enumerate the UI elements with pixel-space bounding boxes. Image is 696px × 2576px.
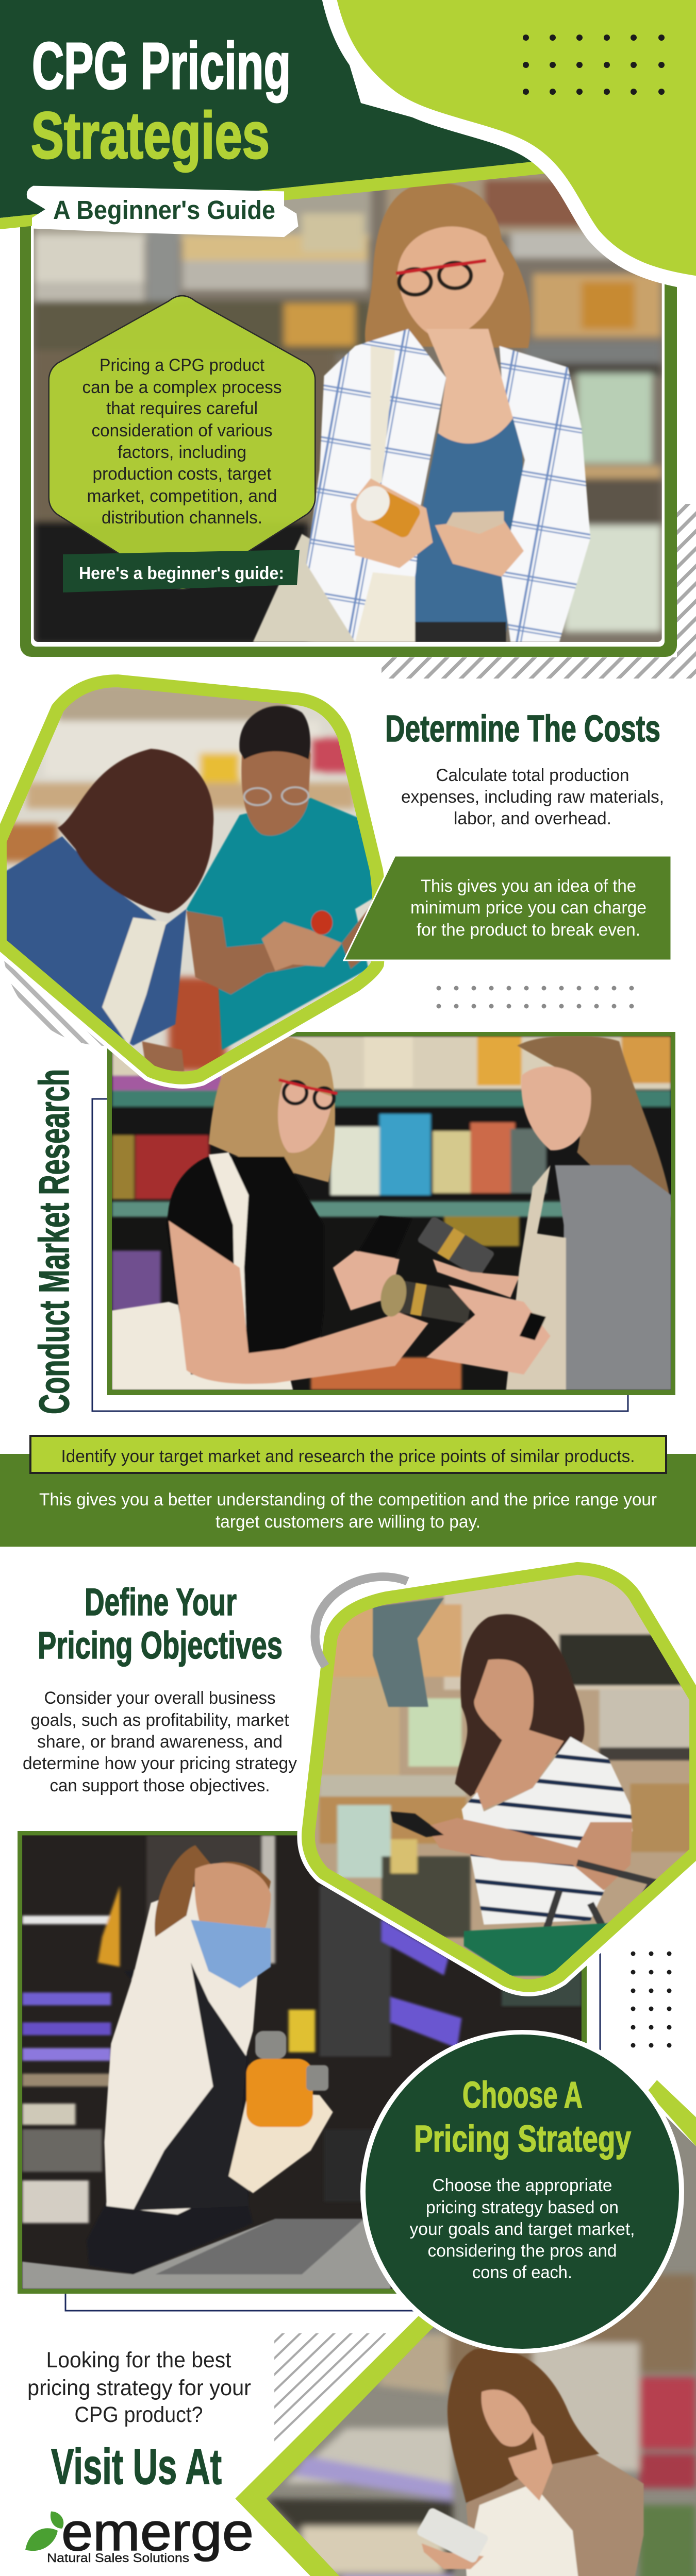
heading: conduct market research: Conduct Market Research [31, 1069, 78, 1414]
striped circle: behind step one photo [3, 840, 209, 1046]
lime corner blob [327, 0, 696, 284]
heading: pricing objectives [38, 1581, 283, 1667]
circle panel: choose a pricing strategy [360, 2030, 684, 2353]
blouse [466, 2484, 586, 2576]
bottle [246, 2059, 313, 2127]
face left [278, 1080, 333, 1153]
hexagon callout: distribution channels. [102, 508, 262, 528]
jacket [466, 2454, 643, 2576]
counter [22, 2219, 391, 2289]
diagonal stripes: closing [274, 2333, 386, 2445]
callout: break-even: minimum price you can charge [410, 898, 647, 918]
logo: emerge: Natural Sales Solutions [47, 2551, 189, 2565]
bag strap [371, 346, 395, 483]
grey shirt [555, 1165, 671, 1390]
right woman hair [517, 1036, 671, 1204]
dot grid: step three [631, 1952, 671, 2047]
black shirt [167, 1157, 324, 1375]
market research photo: two women in snack aisle [112, 1036, 671, 1390]
text block: determine the costs: labor, and overhead. [454, 809, 611, 828]
right woman face [521, 1066, 591, 1150]
guide banner: Here's a beginner's guide: [79, 564, 284, 583]
phone [446, 511, 504, 534]
face [397, 227, 504, 340]
phone [391, 1811, 444, 1837]
bottle [356, 485, 421, 538]
hexagon callout: can be a complex process [82, 378, 281, 397]
mask [191, 1920, 271, 1988]
neck and chest [475, 1724, 564, 1809]
apron [506, 1165, 566, 1390]
cans [417, 1215, 495, 1278]
phone [353, 1215, 412, 1280]
title: CPG Pricing [32, 29, 291, 103]
hexagon callout: market, competition, and [87, 486, 277, 506]
green band: market research [0, 1454, 696, 1547]
title: Strategies [31, 99, 270, 173]
text block: call to action: Looking for the best [46, 2348, 231, 2372]
price card [373, 1598, 444, 1707]
ponytail [155, 1845, 271, 1937]
step three photo: woman with phone and basket [302, 1562, 696, 1997]
face [482, 2389, 533, 2447]
outline rectangle: cashier [65, 1906, 600, 2311]
arm [426, 1818, 633, 1890]
hexagon callout [49, 296, 315, 589]
gloved hand [228, 2091, 333, 2193]
text block: pricing objectives: Consider your overall business [44, 1688, 275, 1708]
hair [448, 2348, 599, 2503]
hair [365, 182, 531, 348]
hand [508, 2422, 553, 2501]
subtitle badge [27, 186, 299, 237]
arm left [169, 1221, 428, 1384]
text block: determine the costs: Calculate total production [436, 766, 629, 785]
woman's hair [58, 749, 213, 913]
striped tee [461, 1737, 633, 1925]
text block: determine the costs: expenses, including raw materials, [401, 787, 664, 807]
circle panel: choose a pricing strategy: considering the pros and [428, 2241, 617, 2261]
glasses [284, 1081, 334, 1108]
can [416, 2506, 489, 2564]
man's head [241, 731, 311, 836]
hands [351, 478, 433, 568]
panel: cashier photo frame [18, 1831, 587, 2294]
shirt [306, 329, 446, 642]
subtitle badge: A Beginner's Guide [53, 195, 275, 225]
basket handles [544, 1863, 653, 1938]
text block: pricing objectives: determine how your pricing strategy [23, 1754, 297, 1773]
hands and jar [262, 922, 342, 971]
lime stripe: top right [647, 2080, 696, 2146]
circle panel: choose a pricing strategy: cons of each. [472, 2263, 572, 2282]
heading: pricing objectives: Pricing Objectives [38, 1624, 283, 1667]
dot grid: header [523, 35, 665, 95]
logo: emerge: emerge [61, 2502, 254, 2562]
intro photo: woman reading product label [34, 162, 662, 645]
text block: pricing objectives: goals, such as profitability, market [31, 1710, 289, 1730]
title [31, 29, 291, 173]
circle panel: choose a pricing strategy: your goals and target market, [409, 2219, 635, 2239]
heading: visit us at: Visit Us At [51, 2438, 222, 2495]
closing photo: woman thinking in produce aisle [267, 2112, 696, 2576]
glasses [399, 263, 471, 295]
text block: pricing objectives: can support those objectives. [49, 1776, 270, 1795]
text block: call to action: CPG product? [74, 2402, 203, 2427]
text block: call to action [27, 2348, 251, 2427]
man's shirt [187, 798, 376, 1050]
text block: pricing objectives: share, or brand awareness, and [37, 1732, 283, 1752]
tank top [415, 418, 524, 632]
callout: break-even: This gives you an idea of the [421, 876, 636, 896]
hexagon callout: production costs, target [93, 464, 272, 484]
lime box: market research [30, 1436, 666, 1473]
panel: intro photo frame [20, 170, 677, 657]
face [474, 1659, 534, 1744]
basket [464, 1923, 621, 1976]
lime box: market research: Identify your target market and research the price points of similar products. [61, 1447, 635, 1466]
panel: market research photo frame [107, 1032, 675, 1395]
hexagon callout: Pricing a CPG product [100, 355, 265, 375]
lime accent strip [0, 161, 551, 229]
hexagon callout: factors, including [118, 443, 246, 462]
shirt [104, 1882, 262, 2214]
text block: call to action: pricing strategy for your [27, 2376, 251, 2400]
circle panel: choose a pricing strategy: pricing strategy based on [426, 2198, 619, 2217]
circle panel: choose a pricing strategy: Choose the appropriate [432, 2176, 612, 2195]
guide banner [63, 550, 300, 592]
outline rectangle: market research [92, 1099, 628, 1411]
text block: determine the costs [401, 766, 664, 828]
man's arm [187, 911, 311, 994]
heading: pricing objectives: Define Your [85, 1581, 237, 1623]
dot grid: step one [436, 986, 634, 1009]
callout: break-even [344, 856, 671, 960]
text block: pricing objectives [23, 1688, 297, 1795]
woman's jacket [0, 836, 187, 1046]
circle panel: choose a pricing strategy: Choose A [462, 2075, 583, 2116]
green band: market research: This gives you a better understanding of the competition and the price range your [39, 1490, 657, 1510]
tote bag [253, 534, 373, 642]
diagonal stripes: intro corner [382, 504, 696, 679]
cashier photo: masked worker with juice bottle [22, 1835, 582, 2289]
green band: market research: target customers are willing to pay. [216, 1512, 480, 1532]
step one photo: couple checking a jar [0, 670, 386, 1088]
circle panel: choose a pricing strategy: Pricing Strategy [414, 2119, 631, 2160]
strap [209, 1153, 248, 1336]
apron [87, 1958, 253, 2275]
neck and chest [427, 328, 513, 445]
tote [112, 1302, 293, 1390]
hexagon callout: that requires careful [106, 399, 258, 418]
lime chevron [235, 2315, 437, 2576]
arc decoration [315, 1577, 407, 1666]
header dark green shape [0, 0, 546, 218]
hair left woman [209, 1036, 335, 1182]
hair [455, 1614, 584, 1797]
hexagon callout: consideration of various [92, 421, 272, 440]
woman's sweater [102, 918, 167, 1046]
callout: break-even: for the product to break even. [417, 920, 640, 940]
